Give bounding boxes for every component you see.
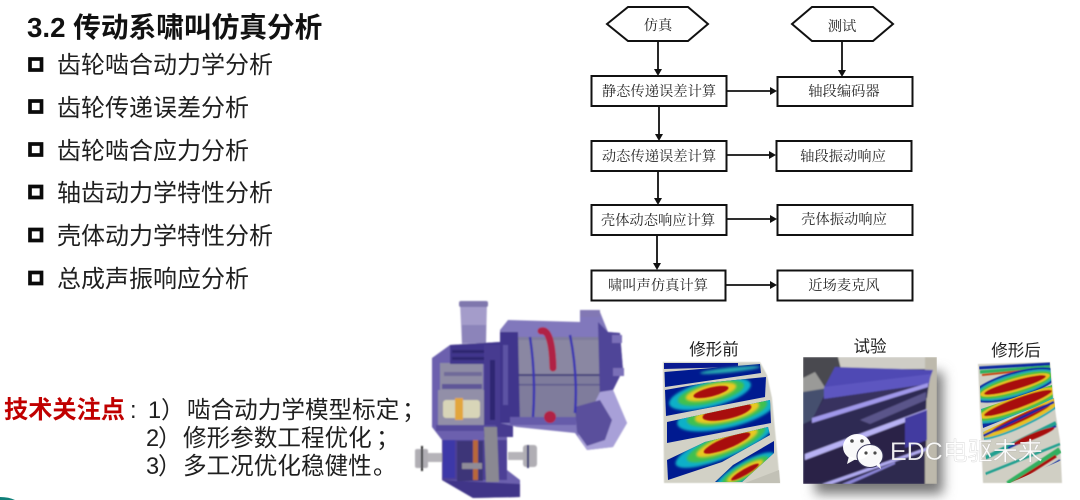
box: static transmission error: 静态传递误差计算 [602, 83, 716, 100]
box: shaft encoder: 轴段编码器 [808, 83, 880, 100]
gear teeth photo [803, 357, 937, 484]
box: housing vibration response: 壳体振动响应 [801, 210, 887, 228]
focus item 2: ） [158, 426, 182, 452]
start node: simulation: 仿真 [644, 16, 673, 34]
box: whine noise simulation [592, 270, 726, 300]
focus item 2: 修形参数工程优化 [183, 425, 372, 452]
tooth 5 stripes [985, 444, 1060, 484]
icon: chat bubbles [843, 434, 883, 469]
focus item 1: ； [402, 398, 426, 424]
motor housing [500, 310, 627, 450]
arrow: dynamic to housing [654, 171, 662, 205]
image: transparent drive unit model [415, 301, 627, 498]
bullet item 6: 总成声振响应分析 [57, 266, 249, 293]
focus item 2: 2 [146, 426, 159, 452]
checklist: analysis items [30, 52, 273, 293]
start node: simulation [607, 7, 708, 41]
box: shaft vibration response: 轴段振动响应 [800, 148, 886, 165]
tooth 3 stripes [983, 398, 1056, 440]
arrow: housing calc to housing vibration [726, 215, 777, 223]
callout: technical focus [4, 397, 426, 480]
image: gear contact after modification [978, 342, 1062, 484]
tooth 2 stripes [981, 385, 1053, 428]
tooth 2 [665, 377, 766, 416]
internal bearing and gears [443, 400, 480, 418]
stub shafts [428, 453, 444, 462]
arrow: housing to whine [653, 235, 661, 270]
bullet item 1: 齿轮啮合动力学分析 [57, 52, 273, 79]
box: shaft encoder [778, 77, 912, 106]
arrow: simulation to static error [654, 41, 662, 76]
bullet item 2: 齿轮传递误差分析 [57, 95, 249, 122]
watermark text: EDC电驱未来 [890, 438, 1043, 466]
start node: test: 测试 [828, 18, 856, 35]
title: 3.2 传动系啸叫仿真分析 [27, 12, 322, 43]
box: housing dynamic response: 壳体动态响应计算 [601, 211, 715, 229]
watermark: EDC logo [843, 434, 1043, 469]
arrow: static to dynamic [655, 106, 663, 141]
box: housing dynamic response [592, 205, 726, 235]
bullet item 4: 轴齿动力学特性分析 [57, 180, 273, 207]
caption: after: 修形后 [991, 341, 1041, 360]
photo shadow [815, 372, 943, 494]
caption: before: 修形前 [689, 340, 739, 359]
box: housing vibration response [778, 205, 912, 235]
focus item 1: : [130, 398, 137, 424]
focus item 3: ） [158, 454, 182, 480]
focus item 3: 3 [146, 454, 159, 480]
tooth 3 [667, 400, 771, 443]
image: test gear photo [803, 337, 943, 494]
gear tooth base [978, 362, 1062, 483]
decorative corner: teal swoosh [0, 497, 15, 500]
focus item 2: ； [376, 426, 400, 452]
caption: test: 试验 [854, 337, 887, 356]
focus item 1: 啮合动力学模型标定 [187, 397, 399, 424]
box: dynamic transmission error [592, 141, 726, 171]
start node: test [792, 7, 893, 41]
arrow: test to encoder [838, 41, 846, 77]
stator rings [530, 337, 534, 417]
callout heading: 技术关注点 [4, 397, 125, 424]
box: near-field microphone: 近场麦克风 [808, 276, 880, 294]
gearbox housing [432, 342, 520, 498]
focus item 1: 1 [148, 398, 161, 424]
arrow: whine to microphone [726, 281, 777, 289]
image: gear contact before modification [660, 340, 780, 496]
red coolant tube [541, 331, 553, 368]
top pipe [460, 302, 487, 345]
arrow: static error to encoder [727, 87, 777, 95]
bullet item 3: 齿轮啮合应力分析 [57, 138, 249, 165]
tooth 4 [667, 427, 770, 480]
box: dynamic transmission error: 动态传递误差计算 [602, 148, 716, 165]
bullet item 5: 壳体动力学特性分析 [57, 223, 273, 250]
lower right grey teeth [745, 470, 780, 483]
gear tooth base [663, 362, 780, 483]
focus item 3: 。 [373, 454, 397, 480]
box: whine noise simulation: 啸叫声仿真计算 [608, 276, 708, 294]
tooth 4 stripes [985, 423, 1056, 458]
box: static transmission error [592, 76, 726, 106]
tooth 5 [715, 441, 774, 482]
arrow: dynamic error to shaft vibration [727, 151, 776, 159]
box: shaft vibration response [776, 141, 912, 171]
flowchart: simulation and test [592, 7, 912, 300]
focus item 1: ） [161, 398, 185, 424]
focus item 3: 多工况优化稳健性 [183, 453, 372, 480]
tooth 1 stripes [979, 362, 1052, 404]
tooth slivers [664, 363, 738, 369]
box: near-field microphone [778, 270, 912, 300]
